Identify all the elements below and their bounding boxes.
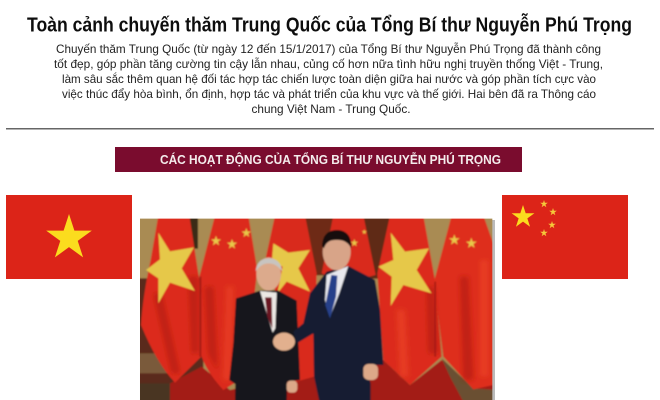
section banner: CÁC HOẠT ĐỘNG CỦA TỔNG BÍ THƯ NGUYỄN PHÚ TRỌNG <box>160 152 501 167</box>
intro text block <box>54 41 603 116</box>
intro text block: Chuyến thăm Trung Quốc (từ ngày 12 đến 15/1/2017) của Tổng Bí thư Nguyễn Phú Trọng đã thành công <box>56 41 601 56</box>
intro text block: chung Việt Nam - Trung Quốc. <box>252 102 410 116</box>
flag stars <box>146 233 195 303</box>
flag folds <box>141 215 201 383</box>
man right <box>293 266 383 400</box>
intro text block: làm sâu sắc thêm quan hệ đối tác hợp tác chiến lược toàn diện giữa hai nước và góp phần tích cực vào <box>62 71 596 86</box>
intro text block: việc thúc đẩy hòa bình, ổn định, hợp tác và phát triển của khu vực và thế giới. Hai bên đã ra Thông cáo <box>62 87 596 101</box>
section banner <box>115 147 522 172</box>
flag: Vietnam <box>6 195 132 279</box>
fold shading <box>153 260 488 380</box>
intro text block: tốt đẹp, góp phần tăng cường tin cậy lẫn nhau, củng cố hơn nữa tình hữu nghị truyền thống Việt - Trung, <box>54 56 603 71</box>
photo: two leaders shaking hands before flags <box>137 215 496 400</box>
flag: China <box>502 195 628 279</box>
man left <box>229 291 300 400</box>
